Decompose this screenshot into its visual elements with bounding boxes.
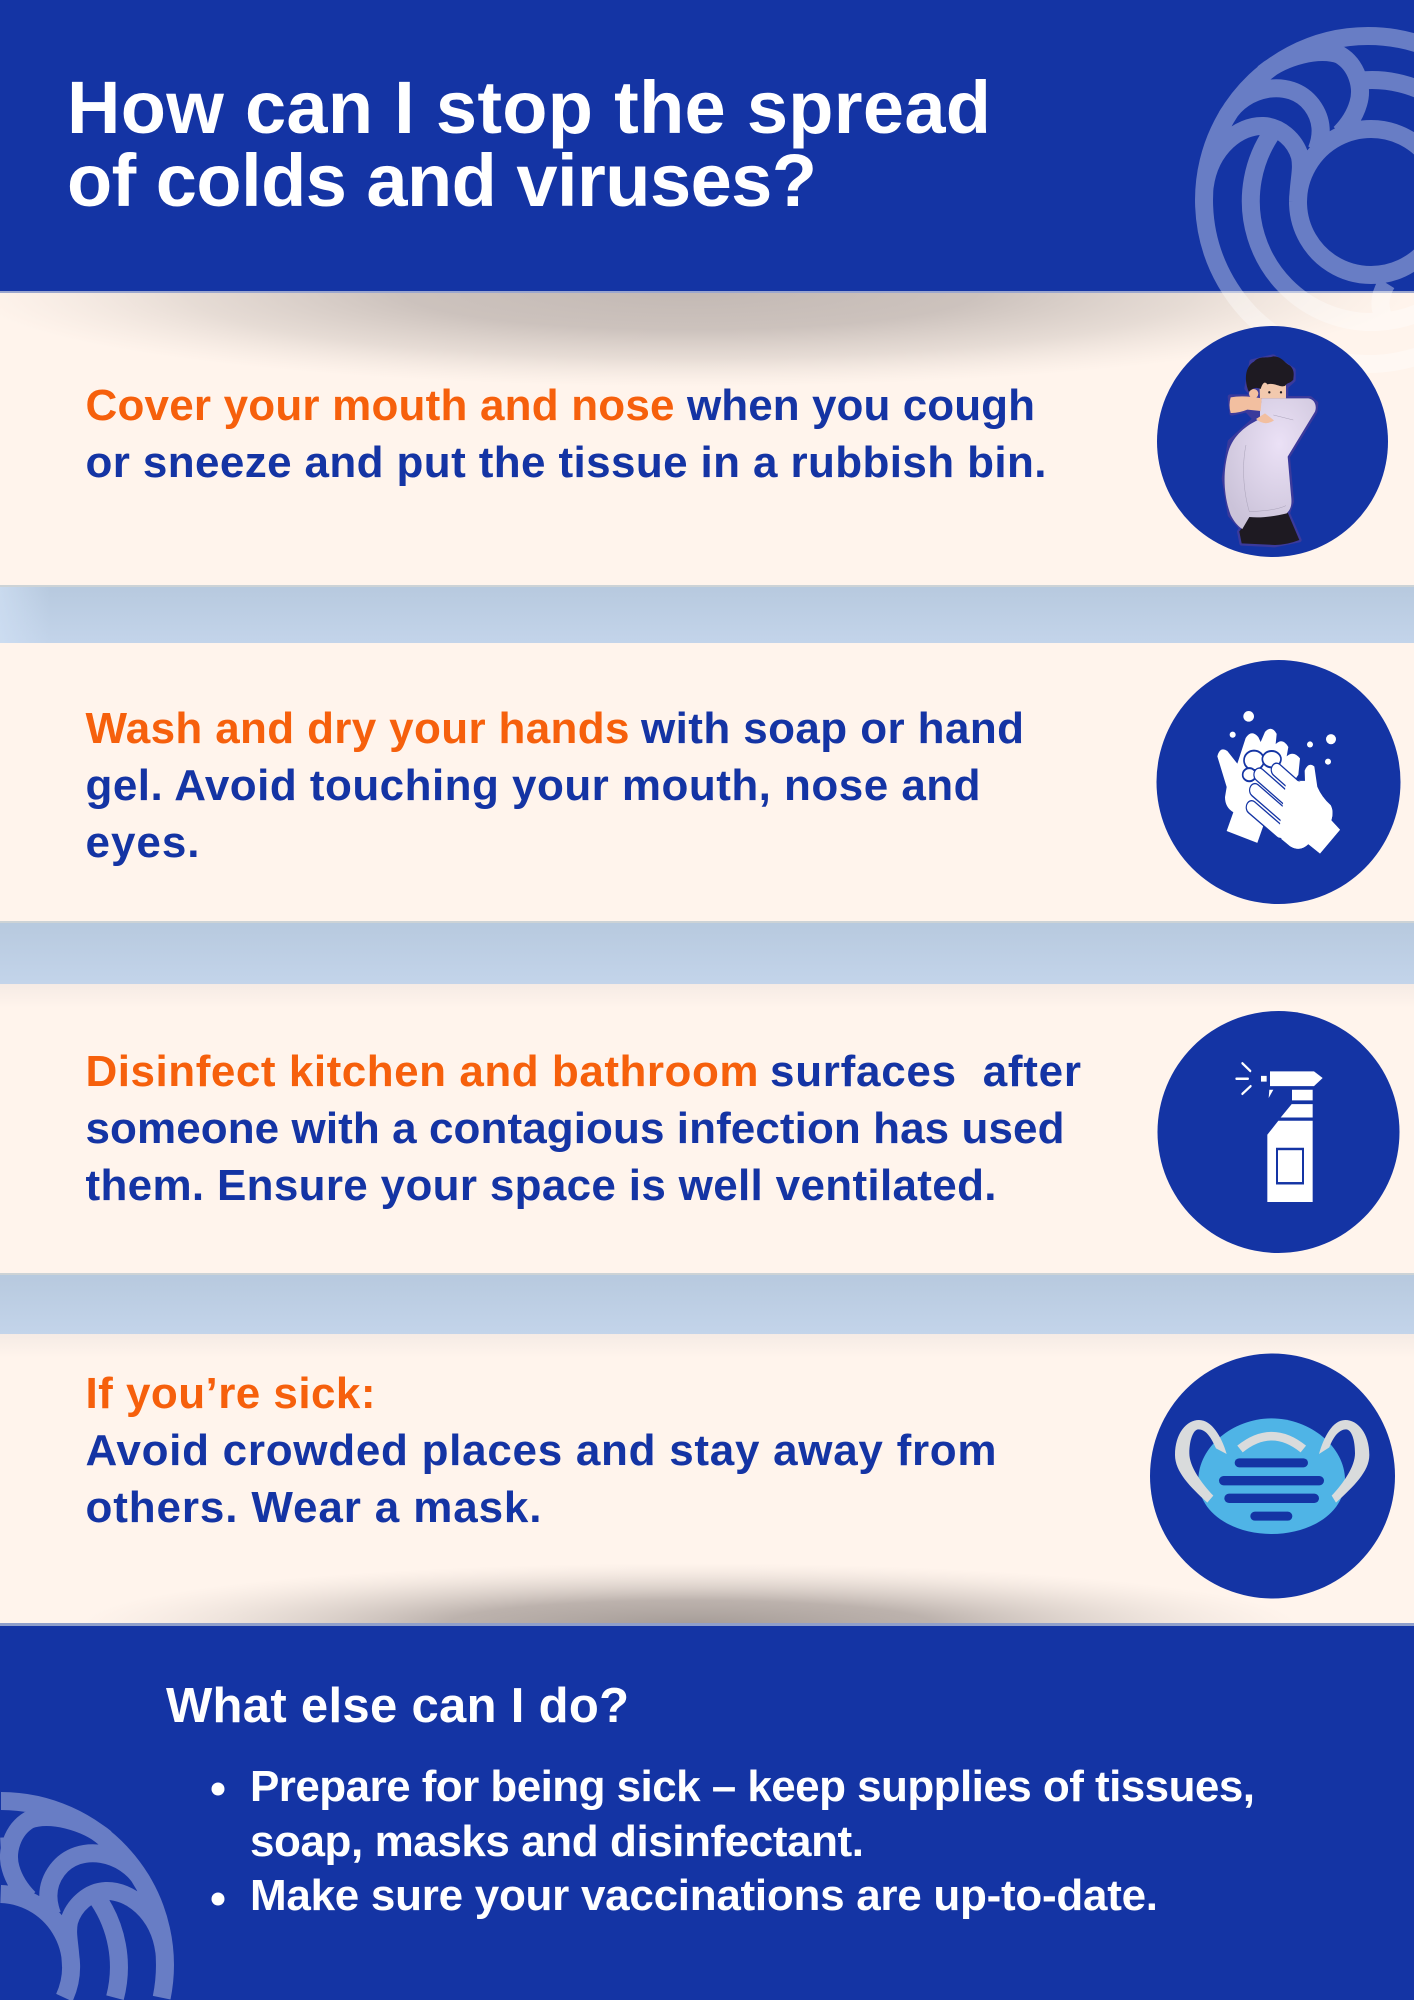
bottle body [1267, 1121, 1313, 1202]
trousers [1239, 513, 1299, 545]
text: cover mouth and nose: when you cough [686, 381, 1035, 430]
footer bullet list: Make sure your vaccinations are up-to-date. [250, 1871, 1158, 1920]
footer bullet list: Prepare for being sick – keep supplies of tissues, [250, 1762, 1255, 1811]
text: wash hands: eyes. [86, 818, 200, 867]
foam [1243, 751, 1281, 781]
text: disinfect [86, 1047, 1081, 1210]
decorative logo: header swirl [1204, 36, 1414, 364]
forearm and fist [1229, 396, 1262, 413]
bottle neck [1281, 1090, 1313, 1118]
hair [1246, 356, 1294, 392]
panel shadow: top [63, 293, 1316, 374]
sweater [1225, 398, 1316, 529]
title: How can I stop the spread [67, 66, 991, 149]
text: cover mouth and nose: or sneeze and put the tissue in a rubbish bin. [86, 438, 1046, 487]
text: wash hands: Wash and dry your hands [86, 704, 630, 753]
front hand fingers [1252, 770, 1303, 832]
nozzle and drip [1261, 1076, 1273, 1098]
text: if you are sick: If you’re sick: [86, 1369, 376, 1418]
spray lines [1236, 1063, 1251, 1094]
text: if you are sick [86, 1369, 996, 1532]
ear loops [1175, 1420, 1369, 1503]
panel: if you are sick [0, 1334, 1414, 1687]
panel shadow: bottom [80, 1563, 1300, 1687]
text: disinfect: Disinfect kitchen and bathroom [86, 1047, 758, 1096]
icon: spray bottle [1158, 1011, 1400, 1253]
title: of colds and viruses? [67, 139, 817, 222]
sweater fold lines [1244, 415, 1293, 512]
text: wash hands: gel. Avoid touching your mouth, nose and [86, 761, 980, 810]
text: disinfect: someone with a contagious infection has used [86, 1104, 1064, 1153]
eyes [1268, 391, 1270, 393]
decorative logo: footer swirl [1, 1801, 165, 1998]
footer bullet list: soap, masks and disinfectant. [250, 1817, 864, 1866]
spray head [1270, 1071, 1323, 1086]
front hand palm [1250, 765, 1340, 853]
divider band 3 [0, 1273, 1414, 1334]
footer heading: What else can I do? [166, 1679, 629, 1733]
icon: face mask [1150, 1354, 1395, 1598]
text: wash hands [86, 704, 1024, 867]
divider band 2 [0, 921, 1414, 984]
neck [1256, 413, 1274, 423]
palm cover [1278, 779, 1340, 853]
icon: washing hands [1156, 660, 1400, 904]
icon: person coughing into elbow [1157, 326, 1388, 557]
face [1259, 382, 1286, 398]
back hand [1217, 729, 1300, 843]
divider band 1 [0, 585, 1414, 643]
mask pleats [1219, 1458, 1324, 1521]
panel: wash hands [0, 643, 1414, 921]
title [67, 66, 991, 222]
person outline halo [1224, 357, 1316, 545]
text: if you are sick: Avoid crowded places and stay away from [86, 1426, 996, 1475]
text: if you are sick: others. Wear a mask. [86, 1483, 542, 1532]
text: wash hands: with soap or hand [640, 704, 1024, 753]
panel: disinfect [0, 984, 1414, 1273]
header band [0, 0, 1414, 292]
bottle label [1277, 1149, 1303, 1183]
panel: cover mouth and nose [63, 293, 1316, 374]
nose wire [1240, 1436, 1303, 1449]
footer bullet list [212, 1762, 1255, 1920]
footer band [0, 1625, 1414, 2000]
mask body [1198, 1418, 1345, 1534]
text: disinfect: surfaces after [770, 1047, 1081, 1096]
bubbles [1230, 711, 1336, 765]
ear [1249, 389, 1258, 398]
text: cover mouth and nose: Cover your mouth and nose [86, 381, 674, 430]
text: disinfect: them. Ensure your space is well ventilated. [86, 1161, 996, 1210]
text: cover mouth and nose [86, 381, 1046, 487]
